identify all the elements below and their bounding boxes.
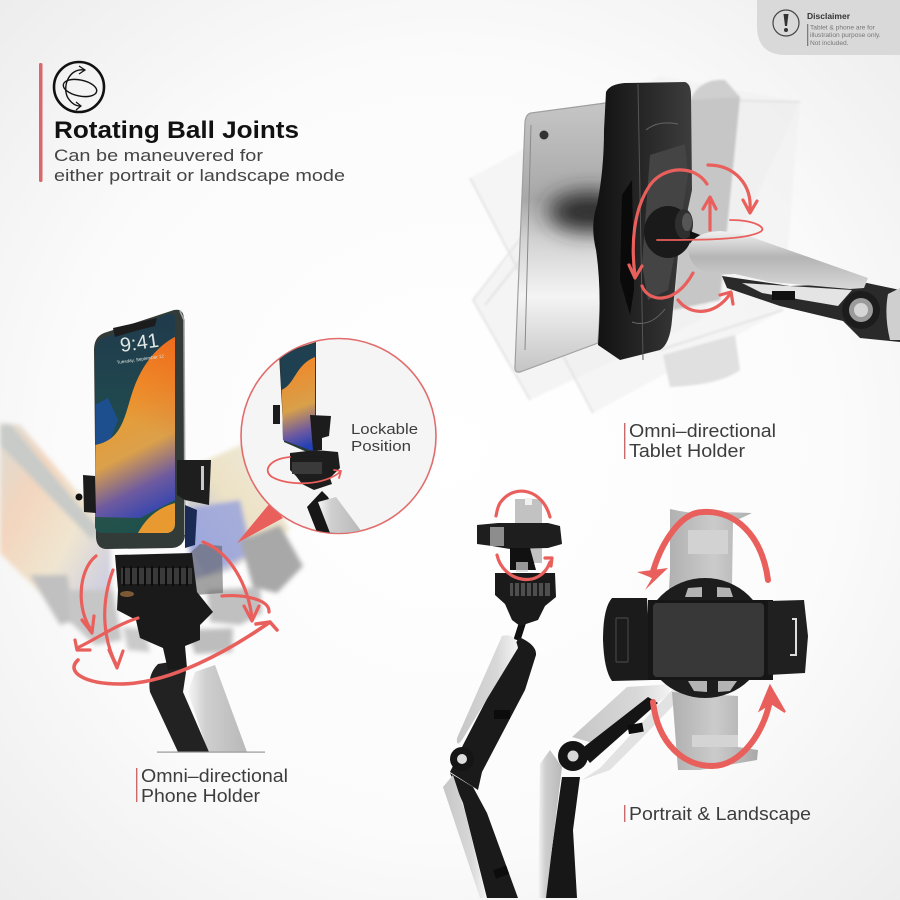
callout: lockable position <box>241 338 436 545</box>
landscape arm joint <box>558 741 588 771</box>
ghost tablets <box>470 76 800 413</box>
icon: rotating ball <box>54 62 104 112</box>
rotation arrows: landscape <box>637 512 785 766</box>
phone <box>90 310 185 549</box>
clamp left <box>603 598 652 681</box>
description: either portrait or landscape mode <box>54 166 345 185</box>
tablet back <box>514 102 606 373</box>
holder center <box>648 600 773 680</box>
callout label: Position <box>351 438 411 455</box>
landscape arm <box>538 684 690 898</box>
label: portrait and landscape: Portrait & Landscape <box>629 804 811 824</box>
base line <box>157 752 265 753</box>
panel: feature heading <box>39 62 345 185</box>
ghost phones <box>0 423 303 654</box>
callout pointer <box>237 503 283 543</box>
side view arm <box>443 618 536 898</box>
phone arm <box>149 660 265 753</box>
cross oval <box>643 578 767 698</box>
label: tablet holder: Tablet Holder <box>629 441 745 461</box>
label: phone holder: Phone Holder <box>141 786 260 806</box>
callout label: Lockable <box>351 421 418 438</box>
phone screen wallpaper <box>95 314 175 533</box>
lens detail <box>268 342 362 545</box>
phone clock: 9:41 <box>119 330 160 357</box>
icon: warning <box>773 10 799 36</box>
label: tablet holder: Omni–directional <box>629 421 776 441</box>
disclaimer text: Tablet & phone are for <box>810 24 876 32</box>
side view mount <box>477 498 562 626</box>
description: Can be maneuvered for <box>54 146 263 165</box>
label: tablet holder <box>624 421 776 461</box>
disclaimer text: Not included. <box>810 40 849 47</box>
side arm joint <box>450 747 474 771</box>
phone notch <box>113 318 157 337</box>
rotation arrows: side mount <box>496 491 552 580</box>
arm joint <box>842 291 880 329</box>
phone mount head <box>115 544 223 670</box>
disclaimer text: illustration purpose only. <box>810 32 881 39</box>
landscape holder <box>603 509 808 770</box>
lens circle <box>241 338 436 534</box>
rotation arrows: phone <box>74 542 277 684</box>
disclaimer title: Disclaimer <box>807 11 851 21</box>
disclaimer text <box>807 24 881 47</box>
disclaimer background <box>757 0 900 55</box>
panel: disclaimer <box>757 0 900 55</box>
heading: Rotating Ball Joints <box>54 117 299 144</box>
phone clamps <box>76 460 211 548</box>
ball joint <box>644 206 708 258</box>
tablet arm <box>688 231 900 342</box>
label: phone holder: Omni–directional <box>141 766 288 786</box>
clamp right <box>768 600 808 675</box>
tablet holder <box>593 82 708 360</box>
accent bar <box>39 63 42 182</box>
label: phone holder <box>136 766 288 806</box>
phone date: Tuesday, September 12 <box>116 353 165 365</box>
rotation arrows: tablet <box>629 165 762 311</box>
gray portrait ghost <box>668 509 760 700</box>
